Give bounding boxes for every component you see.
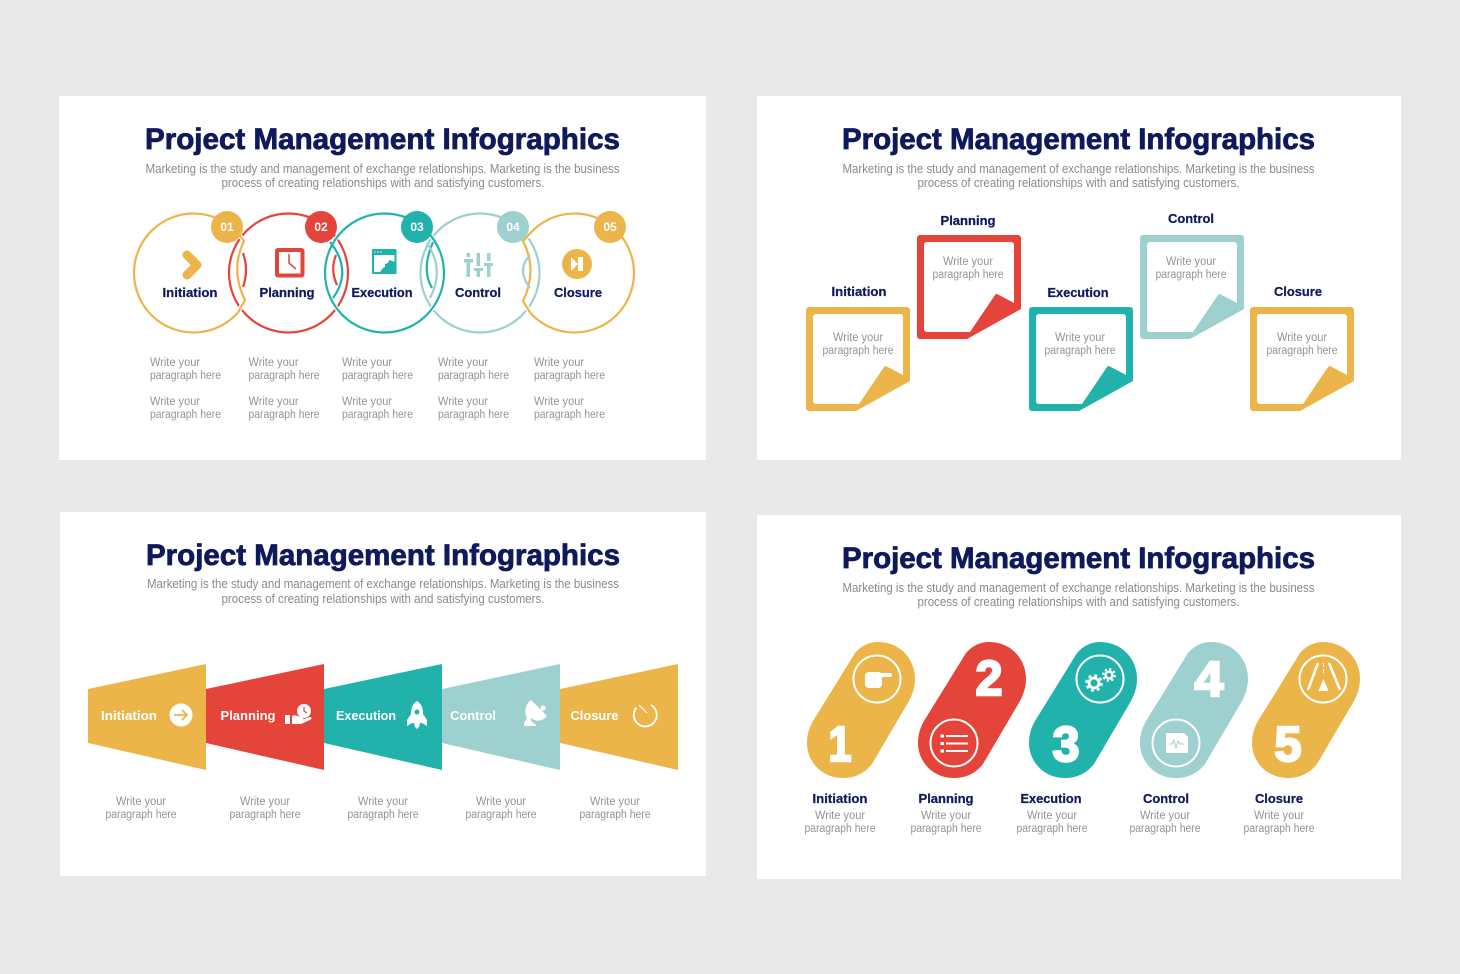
segment paragraphs: paragraph here (106, 809, 176, 821)
paragraph columns: paragraph here (342, 370, 413, 382)
capsule 3 (1016, 642, 1137, 835)
capsule 5 (1244, 642, 1360, 835)
paragraph columns: Write your (342, 357, 392, 369)
circle labels: Control (455, 285, 501, 300)
capsule 4: 4 (1194, 653, 1224, 707)
note: initiation: Write your (833, 332, 883, 344)
capsule 1: Initiation (812, 791, 868, 806)
icon: chevron (187, 255, 197, 275)
paragraph columns: Write your (248, 396, 299, 408)
paragraph columns: Write your (150, 357, 200, 369)
subtitle: process of creating relationships with and satisfying customers. (918, 595, 1240, 609)
capsule 4: paragraph here (1130, 823, 1200, 835)
panel: note cards (757, 96, 1401, 460)
note: initiation: paragraph here (822, 345, 894, 357)
capsule 5: paragraph here (1244, 823, 1314, 835)
note: planning: Write your (943, 256, 993, 268)
segment paragraphs: paragraph here (466, 809, 536, 821)
subtitle: Marketing is the study and management of exchange relationships. Marketing is the business (842, 581, 1314, 595)
number badges: 05 (603, 220, 617, 234)
note: initiation: Initiation (832, 284, 887, 299)
capsule 4: Control (1143, 791, 1189, 806)
title: Project Management Infographics (842, 542, 1315, 575)
subtitle (146, 162, 620, 190)
title: Project Management Infographics (145, 123, 620, 156)
circle labels: Closure (554, 285, 602, 300)
capsule 3: paragraph here (1016, 823, 1088, 835)
circle labels: Initiation (162, 285, 218, 300)
capsule 3: Execution (1020, 791, 1082, 806)
title: Project Management Infographics (842, 123, 1315, 156)
panel: numbered capsules (757, 515, 1401, 879)
segment paragraphs: Write your (476, 796, 526, 808)
capsule 4 (1130, 642, 1248, 835)
number badges: 01 (220, 220, 234, 234)
paragraph columns: Write your (534, 396, 584, 408)
capsule 1: paragraph here (804, 823, 876, 835)
capsule 1 (804, 642, 915, 835)
capsule 2: Write your (921, 810, 971, 822)
segment paragraphs: paragraph here (348, 809, 418, 821)
chain of circles (134, 214, 634, 332)
paragraph columns: Write your (342, 396, 392, 408)
note: execution: Write your (1055, 332, 1105, 344)
number badges: 04 (506, 220, 520, 234)
note: execution: paragraph here (1044, 345, 1116, 357)
subtitle: process of creating relationships with and satisfying customers. (222, 592, 544, 606)
note: planning (917, 213, 1021, 339)
paragraph columns: paragraph here (248, 409, 320, 421)
note: execution (1029, 285, 1133, 411)
subtitle: Marketing is the study and management of exchange relationships. Marketing is the business (147, 577, 619, 591)
segment: closure (560, 664, 678, 770)
icon: play circle (562, 249, 592, 279)
note: control: Write your (1166, 256, 1216, 268)
paragraph columns: Write your (438, 396, 488, 408)
paragraph columns: paragraph here (342, 409, 413, 421)
capsule 3: Write your (1027, 810, 1077, 822)
capsule 5: Closure (1255, 791, 1303, 806)
number badges: 02 (314, 220, 328, 234)
paragraph columns: paragraph here (534, 409, 605, 421)
capsule 5: Write your (1254, 810, 1304, 822)
paragraph columns (150, 357, 605, 421)
capsule 2: Planning (918, 791, 974, 806)
note: closure: Closure (1274, 284, 1322, 299)
note: planning: Planning (940, 213, 996, 228)
panel: trapezoid strip (60, 512, 706, 876)
circle labels: Execution (352, 285, 413, 300)
note: closure: Write your (1277, 332, 1327, 344)
segment: control (442, 664, 560, 770)
circle labels (162, 285, 602, 300)
subtitle (147, 577, 619, 606)
icon: sliders (464, 253, 493, 277)
segment paragraphs: paragraph here (230, 809, 300, 821)
subtitle: Marketing is the study and management of exchange relationships. Marketing is the business (146, 162, 620, 176)
segment paragraphs: Write your (240, 796, 290, 808)
paragraph columns: paragraph here (248, 370, 320, 382)
paragraph columns: Write your (150, 396, 200, 408)
number badges (211, 211, 626, 243)
panel: overlapping circles (59, 96, 706, 460)
note: control (1140, 211, 1244, 339)
circle labels: Planning (260, 285, 315, 300)
paragraph columns: Write your (534, 357, 584, 369)
note: planning: paragraph here (932, 269, 1004, 281)
segment: planning (206, 664, 324, 770)
segment paragraphs (106, 796, 650, 821)
title: Project Management Infographics (146, 539, 620, 572)
segment: initiation: Initiation (101, 708, 157, 723)
icon: window with gear (372, 249, 396, 274)
capsule 2: paragraph here (910, 823, 982, 835)
note: execution: Execution (1048, 285, 1109, 300)
capsule 5: 5 (1274, 718, 1302, 772)
capsule 1: 1 (828, 718, 852, 772)
paragraph columns: Write your (248, 357, 299, 369)
capsule 1: Write your (815, 810, 865, 822)
paragraph columns: paragraph here (150, 409, 221, 421)
segment: execution (324, 664, 442, 770)
note: control: Control (1168, 211, 1214, 226)
subtitle (842, 162, 1314, 190)
paragraph columns: paragraph here (438, 370, 509, 382)
capsule 2 (910, 642, 1026, 835)
segment paragraphs: paragraph here (580, 809, 650, 821)
segment paragraphs: Write your (590, 796, 640, 808)
segment paragraphs: Write your (358, 796, 408, 808)
segment: control: Control (450, 708, 496, 723)
number badges: 03 (410, 220, 424, 234)
segment: planning: Planning (220, 708, 276, 723)
paragraph columns: paragraph here (534, 370, 605, 382)
subtitle (842, 581, 1314, 609)
capsule 3: 3 (1052, 718, 1080, 772)
subtitle: process of creating relationships with and satisfying customers. (222, 176, 544, 190)
segment: closure: Closure (570, 708, 618, 723)
note: control: paragraph here (1156, 269, 1226, 281)
note: closure: paragraph here (1266, 345, 1338, 357)
capsule 2: 2 (976, 652, 1002, 706)
paragraph columns: Write your (438, 357, 488, 369)
capsule 4: Write your (1140, 810, 1190, 822)
note: closure (1250, 284, 1354, 411)
segment paragraphs: Write your (116, 796, 166, 808)
note: initiation (806, 284, 910, 411)
subtitle: Marketing is the study and management of exchange relationships. Marketing is the business (842, 162, 1314, 176)
paragraph columns: paragraph here (438, 409, 509, 421)
paragraph columns: paragraph here (150, 370, 221, 382)
subtitle: process of creating relationships with and satisfying customers. (918, 176, 1240, 190)
segment: initiation (88, 664, 206, 770)
icon: clock (277, 250, 302, 276)
segment: execution: Execution (336, 708, 396, 723)
